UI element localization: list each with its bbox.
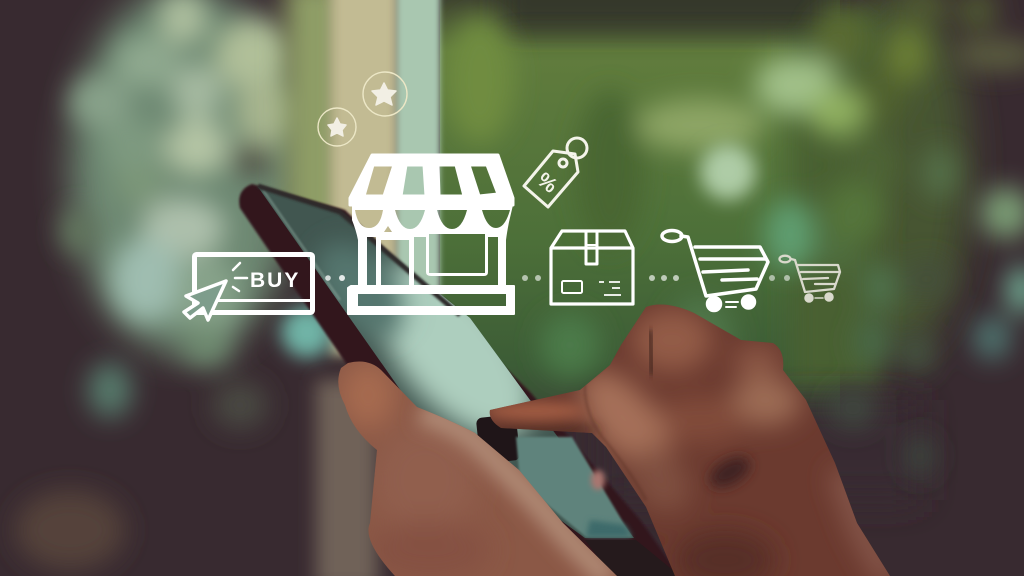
buy label: BUY <box>250 269 300 292</box>
percent sign: % <box>533 168 562 198</box>
icon: storefront <box>348 155 514 314</box>
right hand touching screen <box>480 295 900 576</box>
phone screen <box>258 187 634 538</box>
cursor arrow <box>184 281 226 320</box>
green glow behind the icons <box>440 0 840 430</box>
soft foliage wash left <box>70 0 300 355</box>
centre foliage <box>755 55 839 115</box>
phone top edge <box>258 186 460 315</box>
icon: buy button with cursor <box>184 254 313 320</box>
soft foliage wash right <box>830 0 970 350</box>
lower screen <box>516 437 632 537</box>
smartphone <box>239 170 680 576</box>
phone body <box>239 184 680 576</box>
icon: star badge small <box>318 108 356 146</box>
left foliage <box>159 0 207 44</box>
store base <box>348 286 514 314</box>
window column <box>285 0 345 240</box>
click rays <box>233 263 247 291</box>
right foliage <box>812 11 868 63</box>
left hand holding phone <box>338 362 617 576</box>
connector dots <box>325 275 790 281</box>
store front <box>352 205 513 290</box>
icon: star badge large <box>363 72 407 116</box>
icon: shopping cart large <box>662 230 768 310</box>
phone dark bezel notch <box>476 414 520 464</box>
icon: shopping cart small <box>780 256 840 302</box>
icon: parcel box <box>551 231 633 304</box>
store awning <box>350 155 513 205</box>
icon: price tag with percent <box>524 138 587 207</box>
